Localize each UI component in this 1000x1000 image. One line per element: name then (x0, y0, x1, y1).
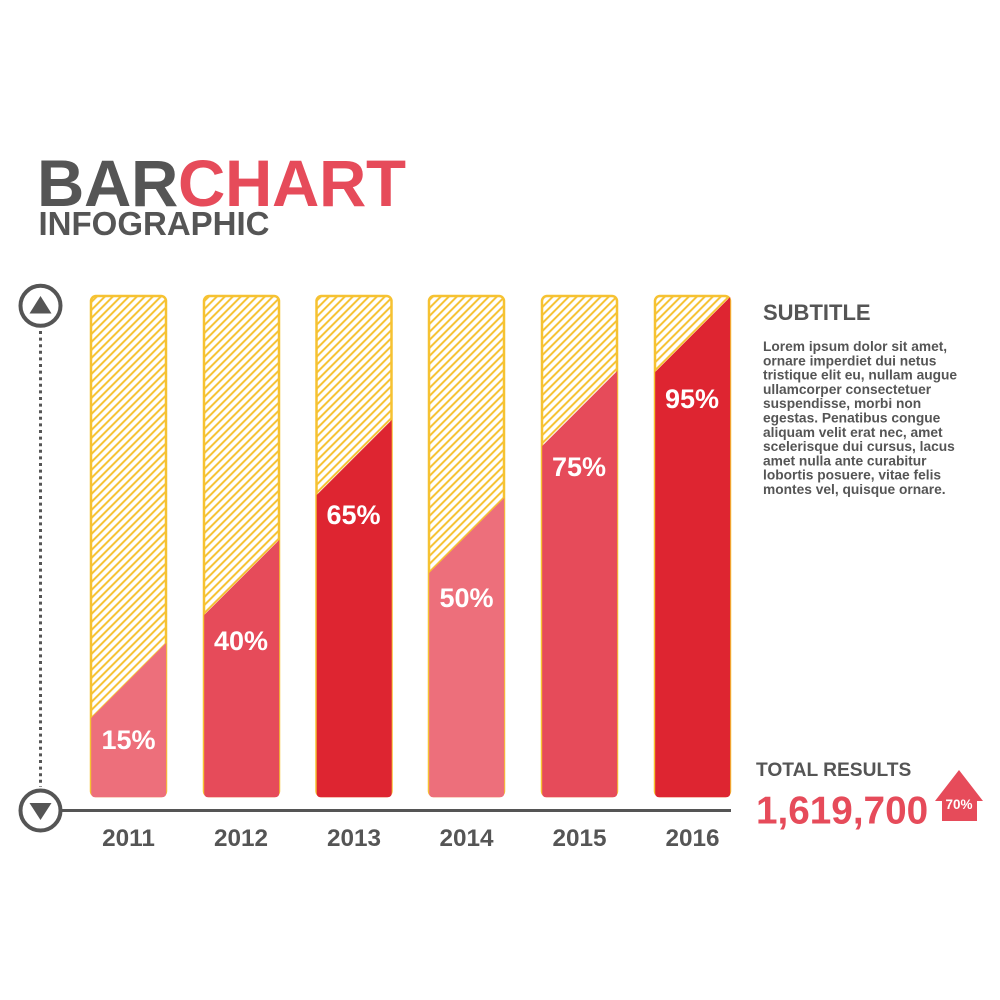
bar 2016 (655, 296, 730, 852)
bar 2014: 2014 (439, 825, 494, 852)
body text: montes vel, quisque ornare. (763, 482, 946, 497)
bar 2013 (316, 296, 392, 852)
axis (20, 286, 731, 830)
body text: egestas. Penatibus congue (763, 410, 941, 426)
body text: aliquam velit erat nec, amet (763, 425, 943, 440)
title: BARCHART (37, 147, 406, 220)
body text: tristique elit eu, nullam augue (763, 368, 957, 383)
body text: amet nulla ante curabitur (763, 453, 927, 468)
total results (756, 760, 983, 832)
icon: down arrow (20, 790, 60, 830)
bar 2015: 2015 (552, 825, 607, 852)
bar 2012 (204, 296, 279, 852)
bar 2011: 2011 (102, 825, 155, 852)
bar 2011 (91, 296, 166, 852)
bar 2015 (542, 296, 617, 852)
subtitle: SUBTITLE (763, 300, 871, 325)
icon: up arrow 70%: 70% (945, 797, 973, 812)
body text: ornare imperdiet dui netus (763, 353, 937, 368)
total results: 1,619,700 (756, 790, 928, 832)
icon: up arrow (20, 286, 60, 326)
body text: Lorem ipsum dolor sit amet, (763, 339, 947, 354)
bar 2015: 75% (552, 452, 606, 482)
bar 2014 (429, 296, 504, 852)
body text: ullamcorper consectetuer (763, 382, 932, 397)
title: INFOGRAPHIC (38, 205, 270, 242)
body text (763, 339, 957, 497)
bar 2011: 15% (101, 725, 156, 755)
bar 2012: 40% (214, 626, 268, 656)
body text: suspendisse, morbi non (763, 396, 921, 411)
bar 2012: 2012 (214, 825, 268, 852)
total results: TOTAL RESULTS (756, 760, 911, 781)
bar 2016: 95% (665, 384, 719, 414)
bar 2013: 65% (326, 500, 381, 530)
bar 2014: 50% (439, 583, 494, 613)
body text: scelerisque dui cursus, lacus (763, 439, 955, 454)
bar 2013: 2013 (327, 825, 381, 852)
bar 2016: 2016 (665, 825, 720, 852)
icon: up arrow 70% (935, 770, 983, 821)
body text: lobortis posuere, vitae felis (763, 468, 941, 483)
